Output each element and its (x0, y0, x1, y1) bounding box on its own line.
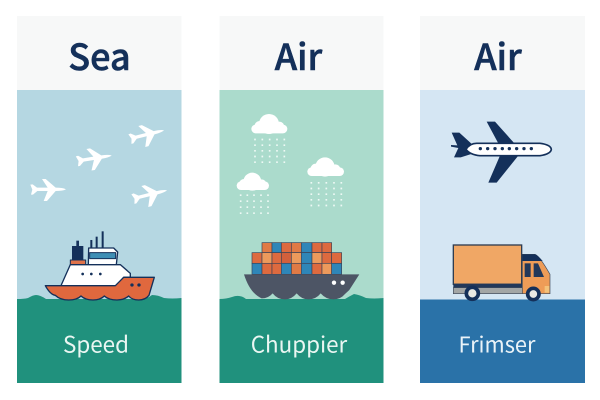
windows (479, 147, 533, 150)
cloud 2 (307, 157, 344, 177)
heading: Air: Air (474, 29, 522, 81)
panel: sea / speed (17, 16, 182, 383)
rain 2 (311, 182, 341, 207)
panel: air / chuppier (220, 16, 384, 383)
icon: navy plane (451, 122, 551, 183)
portholes (332, 280, 336, 285)
wheels (466, 287, 478, 299)
icon: container ship (244, 243, 359, 299)
water band (17, 295, 182, 383)
sky background (17, 90, 182, 302)
label: Speed: Speed (63, 328, 129, 360)
sky background (420, 90, 585, 302)
panel header background (420, 16, 585, 90)
water band (420, 300, 585, 383)
cloud 3 (237, 173, 269, 191)
panel header background (17, 16, 182, 90)
heading: Air: Air (275, 29, 323, 81)
containers (252, 243, 342, 274)
icon: white planes (30, 120, 170, 210)
water band (220, 294, 384, 383)
icon: ferry ship (45, 231, 154, 300)
cargo box (453, 245, 522, 284)
cloud 1 (251, 114, 287, 134)
wings and tail (451, 122, 518, 183)
rain 3 (241, 194, 268, 215)
panel: air / frimser (420, 16, 585, 383)
heading: Sea: Sea (68, 29, 131, 81)
fuselage (466, 143, 551, 156)
label: Chuppier: Chuppier (251, 328, 348, 360)
cab (522, 254, 550, 294)
icon: clouds with rain (237, 114, 344, 215)
cab windows (525, 263, 531, 277)
label: Frimser: Frimser (459, 328, 536, 360)
hull (244, 274, 359, 299)
rain 1 (255, 139, 284, 164)
chassis (453, 284, 523, 288)
hull (45, 277, 154, 300)
panel header background (220, 16, 384, 90)
sky background (220, 90, 384, 302)
icon: truck (453, 245, 550, 300)
